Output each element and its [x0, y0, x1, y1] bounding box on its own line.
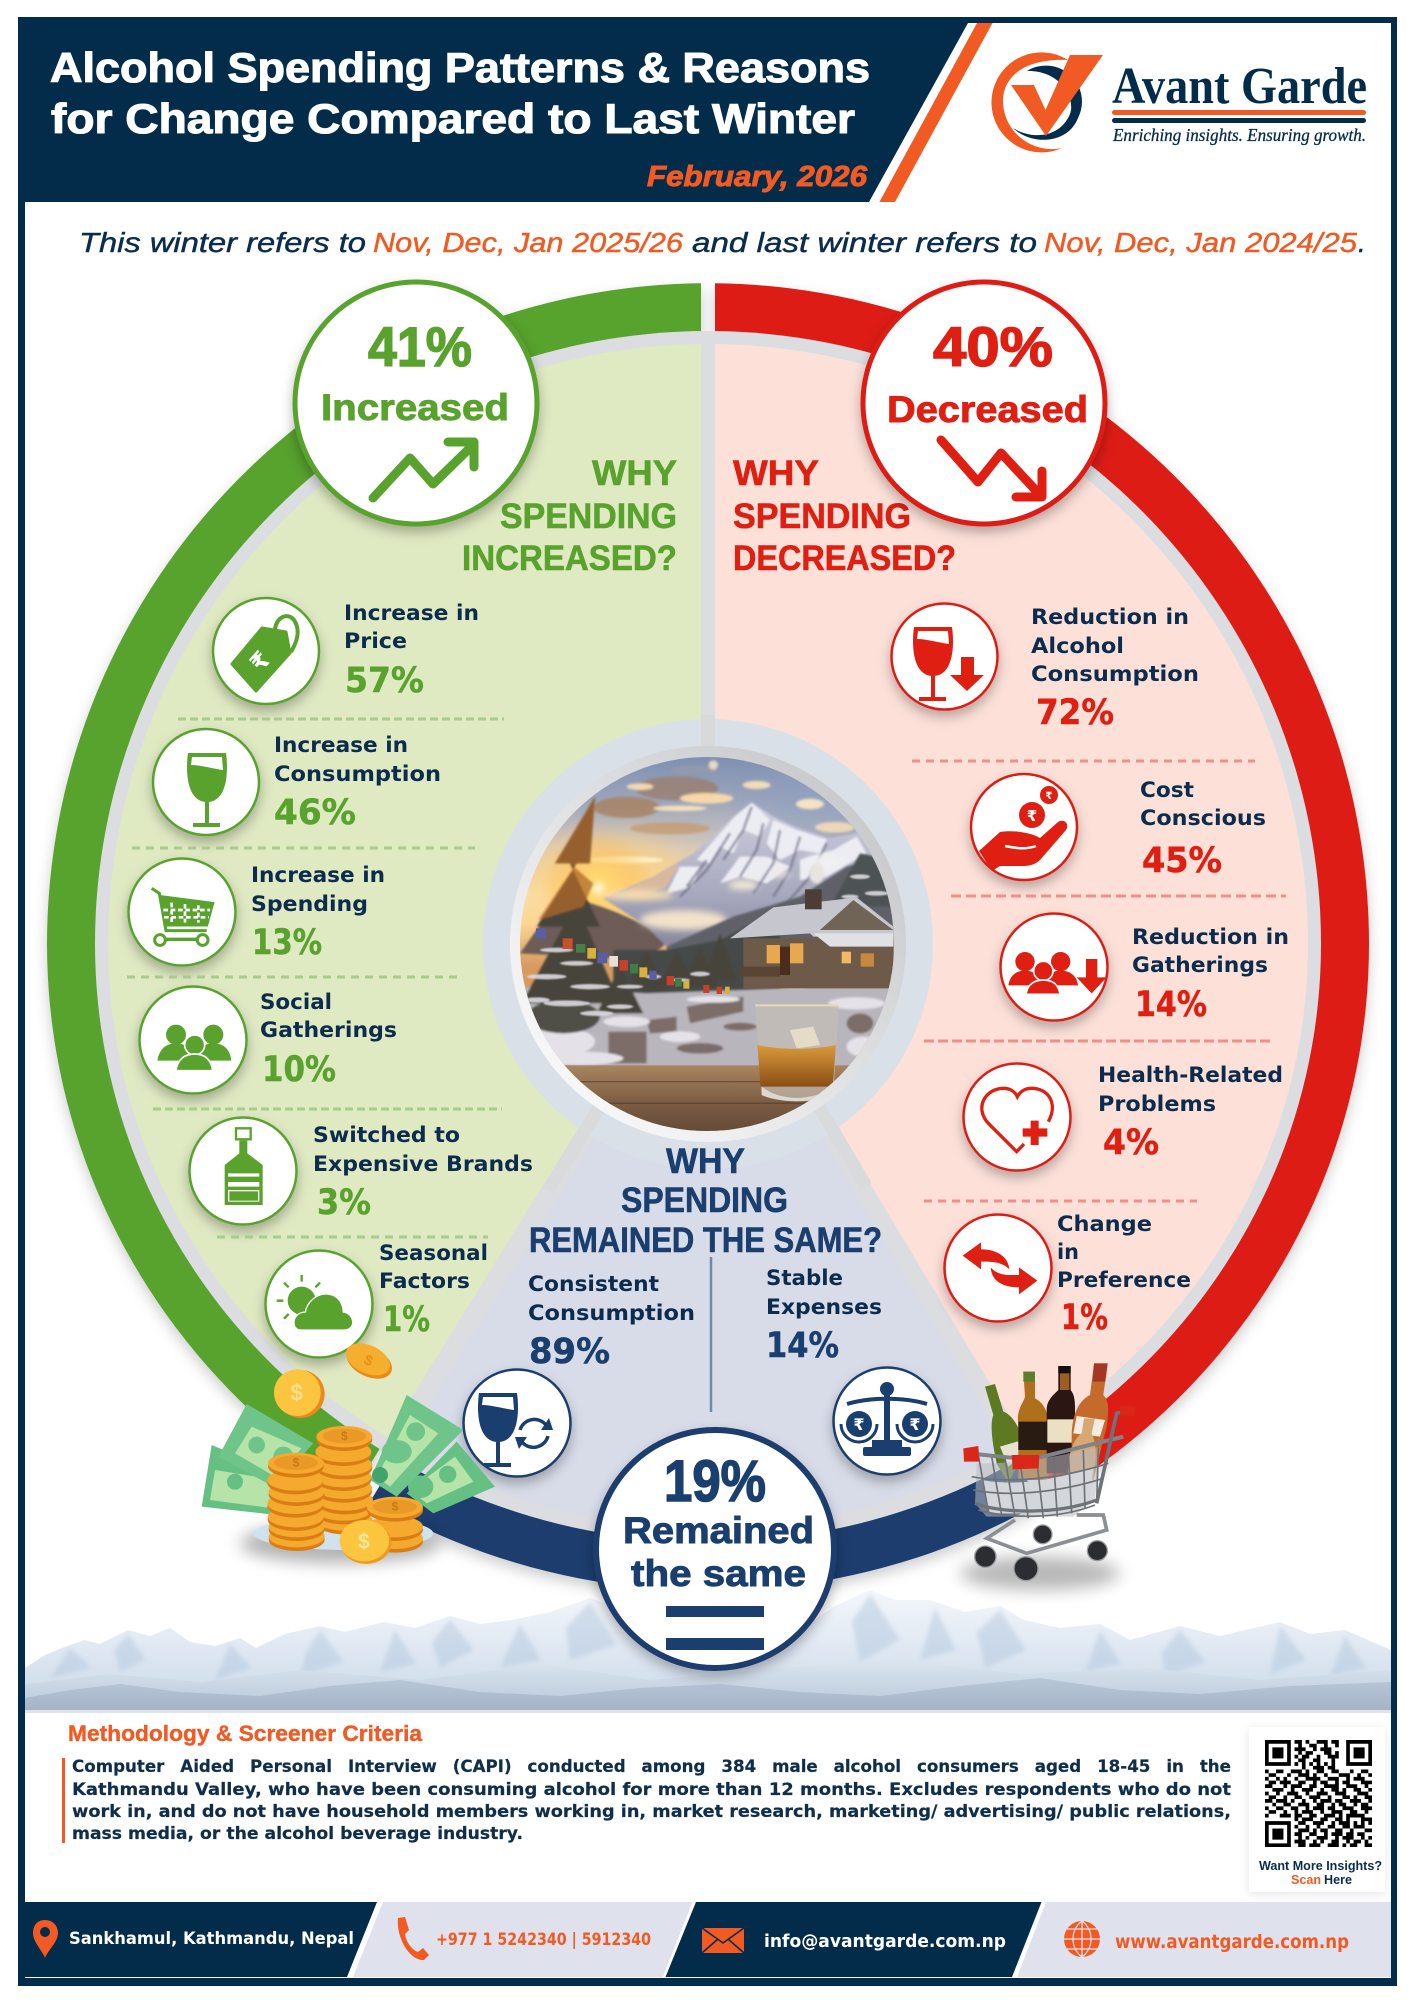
- coins: $: [358, 1529, 370, 1553]
- heading: why spending remained the same: SPENDING: [621, 1181, 788, 1220]
- reason: switched to expensive brands: Switched to: [313, 1123, 460, 1147]
- coin stacks: $: [341, 1429, 348, 1443]
- coin stacks: [267, 1426, 423, 1553]
- prayer flags: [536, 928, 730, 994]
- reason: health-related problems: 4%: [1103, 1123, 1159, 1163]
- reason: consistent consumption: 89%: [529, 1332, 610, 1372]
- reason: increase in spending: [128, 858, 385, 966]
- reason: increase in price: Increase in: [344, 601, 479, 625]
- icon: phone: [398, 1917, 429, 1960]
- QR code panel: Scan: [1291, 1873, 1321, 1887]
- definition note: This winter refers to: [79, 227, 366, 258]
- reason: increase in price: Price: [344, 629, 407, 653]
- reason: reduction in gatherings: Reduction in: [1132, 925, 1289, 949]
- panel: increased sector: [108, 344, 701, 1438]
- heading: why spending remained the same: [529, 1142, 882, 1260]
- methodology body: Kathmandu Valley, who have been consuming alcohol for more than 12 months. Excludes respondents who do not: [72, 1780, 1231, 1799]
- panel: decreased sector: [715, 344, 1308, 1428]
- reason: seasonal factors: Factors: [379, 1269, 470, 1293]
- reason: consistent consumption: [464, 1272, 695, 1476]
- reason: increase in consumption: Consumption: [274, 762, 441, 786]
- snow on trees: [523, 874, 889, 1016]
- methodology heading: Methodology & Screener Criteria: [68, 1721, 423, 1746]
- reason: stable expenses: Stable: [766, 1266, 843, 1290]
- heading: why spending decreased: DECREASED?: [733, 539, 956, 578]
- reason: switched to expensive brands: 3%: [317, 1183, 371, 1223]
- QR code panel: Here: [1324, 1873, 1352, 1887]
- reason: reduction in alcohol consumption: Reduction in: [1031, 605, 1189, 629]
- mountain band: [25, 1590, 1391, 1713]
- methodology body: Computer Aided Personal Interview (CAPI) conducted among 384 male alcohol consumers aged 18-45 in the: [72, 1757, 1231, 1776]
- heading: why spending remained the same: WHY: [666, 1142, 745, 1181]
- address: Sankhamul, Kathmandu, Nepal: [69, 1929, 354, 1949]
- reason: consistent consumption: Consistent: [528, 1272, 659, 1296]
- badge: 41% increased: Increased: [321, 387, 509, 428]
- reason: increase in spending: Spending: [251, 892, 368, 916]
- illustration: shopping cart with bottles: [960, 1363, 1135, 1590]
- logo: Avant Garde: [991, 52, 1367, 152]
- reason: social gatherings: 10%: [262, 1050, 336, 1090]
- reason: cost conscious: Conscious: [1140, 806, 1266, 830]
- definition note: .: [1358, 227, 1366, 258]
- methodology body: work in, and do not have household members working in, market research, marketing/ advertising/ public relations,: [72, 1802, 1231, 1821]
- title: [50, 44, 870, 142]
- reason: change in preference: Preference: [1057, 1268, 1191, 1292]
- reason: reduction in alcohol consumption: Consumption: [1031, 662, 1199, 686]
- heading: why spending decreased: [733, 454, 956, 578]
- heading: why spending remained the same: REMAINED THE SAME?: [529, 1221, 882, 1260]
- reason: seasonal factors: Seasonal: [379, 1241, 488, 1265]
- reason: stable expenses: [766, 1266, 940, 1474]
- reason: cost conscious: Cost: [1140, 778, 1194, 802]
- clouds: [583, 760, 855, 863]
- title: Alcohol Spending Patterns & Reasons: [50, 44, 870, 91]
- reason: health-related problems: Problems: [1098, 1092, 1216, 1116]
- reason: stable expenses: ₹: [909, 1415, 921, 1434]
- reason: increase in consumption: Increase in: [274, 733, 408, 757]
- QR code: [1265, 1740, 1372, 1847]
- snow ground: [513, 983, 900, 1073]
- reason: reduction in gatherings: 14%: [1135, 985, 1207, 1025]
- badge: 41% increased: [295, 282, 537, 524]
- icon: globe: [1064, 1921, 1100, 1957]
- header banner: [25, 23, 992, 202]
- reason: stable expenses: ₹: [853, 1415, 865, 1434]
- badge: 41% increased: 41%: [368, 315, 472, 378]
- definition note: Nov, Dec, Jan 2025/26: [373, 227, 683, 258]
- reason: consistent consumption: Consumption: [528, 1301, 695, 1325]
- reason: increase in consumption: 46%: [274, 793, 356, 833]
- reason: reduction in alcohol consumption: 72%: [1036, 693, 1114, 733]
- QR caption: Want More Insights?: [1259, 1859, 1382, 1873]
- trees: [522, 797, 737, 1013]
- heading: why spending decreased: SPENDING: [733, 497, 911, 536]
- methodology body: [72, 1757, 1231, 1843]
- badge: 19% remained the same: Remained: [623, 1510, 814, 1551]
- methodology block: [62, 1721, 1231, 1843]
- bottles: [985, 1363, 1108, 1483]
- QR code panel: [1249, 1727, 1385, 1892]
- reason: change in preference: 1%: [1061, 1298, 1108, 1338]
- reason: increase in price: [213, 598, 479, 704]
- reason: cost conscious: [971, 774, 1266, 881]
- reason: stable expenses: Expenses: [766, 1295, 882, 1319]
- panel: same sector: [108, 344, 1308, 1528]
- coin stacks: $: [392, 1500, 399, 1514]
- coins: [274, 1337, 397, 1564]
- reason: reduction in gatherings: Gatherings: [1132, 953, 1268, 977]
- badge: 40% decreased: 40%: [933, 315, 1053, 378]
- heading: why spending increased: SPENDING: [500, 497, 677, 536]
- reason: social gatherings: [140, 986, 397, 1094]
- photo: winter mountain cabin and whisky glass: [520, 757, 894, 1131]
- footer contact bar: [25, 1902, 1391, 1977]
- badge: 19% remained the same: the same: [631, 1553, 806, 1594]
- reason: change in preference: [944, 1212, 1191, 1338]
- badge: 19% remained the same: 19%: [664, 1449, 766, 1514]
- website: www.avantgarde.com.np: [1115, 1931, 1349, 1953]
- reason: increase in spending: 13%: [252, 923, 322, 963]
- reason: change in preference: Change: [1057, 1212, 1152, 1236]
- reason: switched to expensive brands: [190, 1118, 533, 1224]
- reason: switched to expensive brands: Expensive Brands: [313, 1152, 533, 1176]
- reason: reduction in alcohol consumption: Alcohol: [1031, 634, 1124, 658]
- reason: social gatherings: Social: [260, 990, 332, 1014]
- reason: cost conscious: 45%: [1142, 841, 1222, 881]
- panel content: spending increased: [127, 454, 677, 1358]
- illustration: money and coins: [202, 1337, 495, 1564]
- reason: health-related problems: Health-Related: [1098, 1063, 1283, 1087]
- reason: health-related problems: [964, 1063, 1283, 1170]
- reason: cost conscious: ₹: [1046, 791, 1053, 802]
- reason: reduction in gatherings: [1000, 914, 1289, 1025]
- panel content: spending remained the same: [464, 1142, 940, 1476]
- reason: seasonal factors: 1%: [383, 1300, 430, 1340]
- icon: envelope: [702, 1928, 744, 1953]
- title: for Change Compared to Last Winter: [51, 95, 855, 142]
- email: info@avantgarde.com.np: [764, 1931, 1006, 1952]
- definition note: Nov, Dec, Jan 2024/25: [1044, 227, 1357, 258]
- heading: why spending increased: WHY: [592, 454, 677, 493]
- definition note: and last winter refers to: [692, 227, 1037, 258]
- heading: why spending increased: [462, 454, 677, 578]
- reason: change in preference: in: [1057, 1240, 1079, 1264]
- icon: location pin: [33, 1920, 58, 1958]
- definition note: [79, 227, 1366, 258]
- reason: social gatherings: Gatherings: [260, 1018, 397, 1042]
- coin stacks: $: [293, 1456, 300, 1470]
- ring segments: [47, 283, 1369, 1591]
- panel content: spending decreased: [733, 454, 1289, 1338]
- whisky glass: [755, 1005, 839, 1101]
- phone numbers: +977 1 5242340 | 5912340: [436, 1930, 651, 1950]
- logo: Avant Garde: Avant Garde: [1112, 58, 1367, 115]
- table: [564, 1065, 850, 1131]
- heading: why spending decreased: WHY: [733, 454, 819, 493]
- center ring: [483, 715, 933, 1190]
- reason: increase in price: 57%: [345, 661, 424, 701]
- badge: 19% remained the same: [596, 1430, 834, 1668]
- coins: $: [361, 1352, 375, 1370]
- reason: seasonal factors: [266, 1241, 488, 1358]
- cart caps and wheels: [963, 1406, 1135, 1469]
- basket: [975, 1447, 1100, 1517]
- heading: why spending increased: INCREASED?: [462, 539, 677, 578]
- logo: Avant Garde: Enriching insights. Ensuring growth.: [1112, 125, 1366, 145]
- reason: reduction in alcohol consumption: [892, 604, 1199, 733]
- methodology body: mass media, or the alcohol beverage industry.: [72, 1824, 523, 1843]
- reason: increase in price: ₹: [244, 646, 276, 677]
- badge: 40% decreased: Decreased: [887, 389, 1088, 430]
- cabin: [743, 938, 893, 988]
- reason: increase in consumption: [153, 729, 441, 835]
- reason: stable expenses: 14%: [766, 1326, 839, 1366]
- hills and peak: [520, 803, 893, 960]
- coins: $: [290, 1380, 303, 1406]
- reason: increase in spending: Increase in: [251, 863, 385, 887]
- date: February, 2026: [647, 161, 868, 193]
- badge: 40% decreased: [863, 282, 1105, 524]
- donut chart: [47, 283, 1369, 1591]
- reason: cost conscious: ₹: [1027, 807, 1037, 825]
